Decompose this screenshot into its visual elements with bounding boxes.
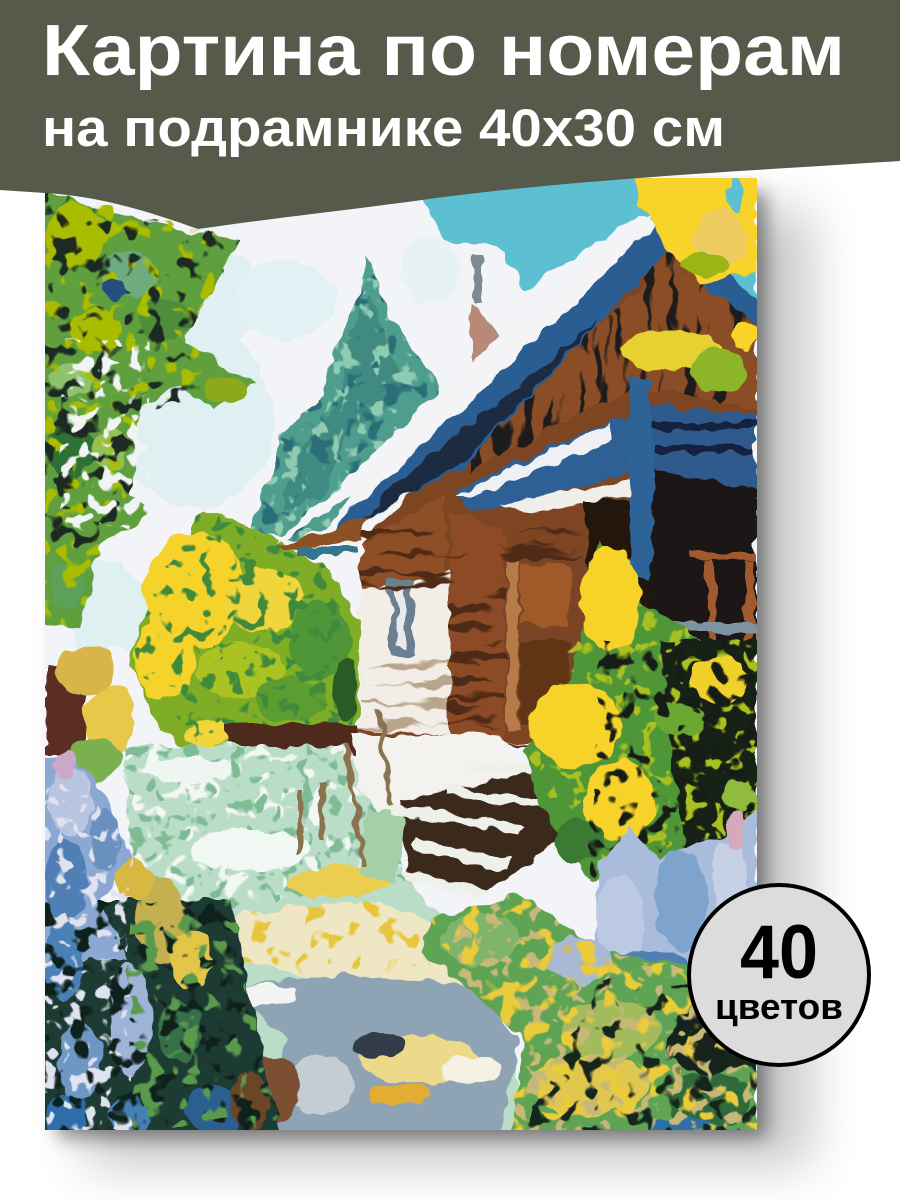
right yellow and green bushes — [525, 540, 758, 880]
lupines and shrubs left — [40, 751, 280, 1137]
badge: 40 colours: 40 — [740, 910, 818, 995]
ground and path — [125, 745, 530, 1135]
title: Картина по номерам — [42, 11, 845, 91]
background fence and bushes left — [45, 646, 136, 782]
canvas shadow — [58, 192, 810, 1165]
fir tree — [250, 252, 440, 540]
sky — [60, 170, 757, 650]
lupines right — [594, 809, 757, 966]
porch roof and post — [455, 378, 757, 650]
roof — [272, 205, 757, 556]
chimney — [472, 255, 498, 375]
badge: 40 colours — [689, 885, 869, 1065]
subtitle: на подрамнике 40х30 см — [42, 99, 725, 158]
badge: 40 colours: цветов — [715, 986, 843, 1027]
header banner — [0, 0, 900, 229]
steps and white foundation — [300, 710, 560, 900]
log cabin walls — [360, 240, 757, 745]
painting: cottage in a garden — [40, 170, 758, 1137]
yellow top right foliage — [620, 175, 757, 392]
yellow bush — [130, 510, 360, 784]
bottom right greenery — [420, 895, 757, 1135]
left foliage — [40, 190, 255, 630]
